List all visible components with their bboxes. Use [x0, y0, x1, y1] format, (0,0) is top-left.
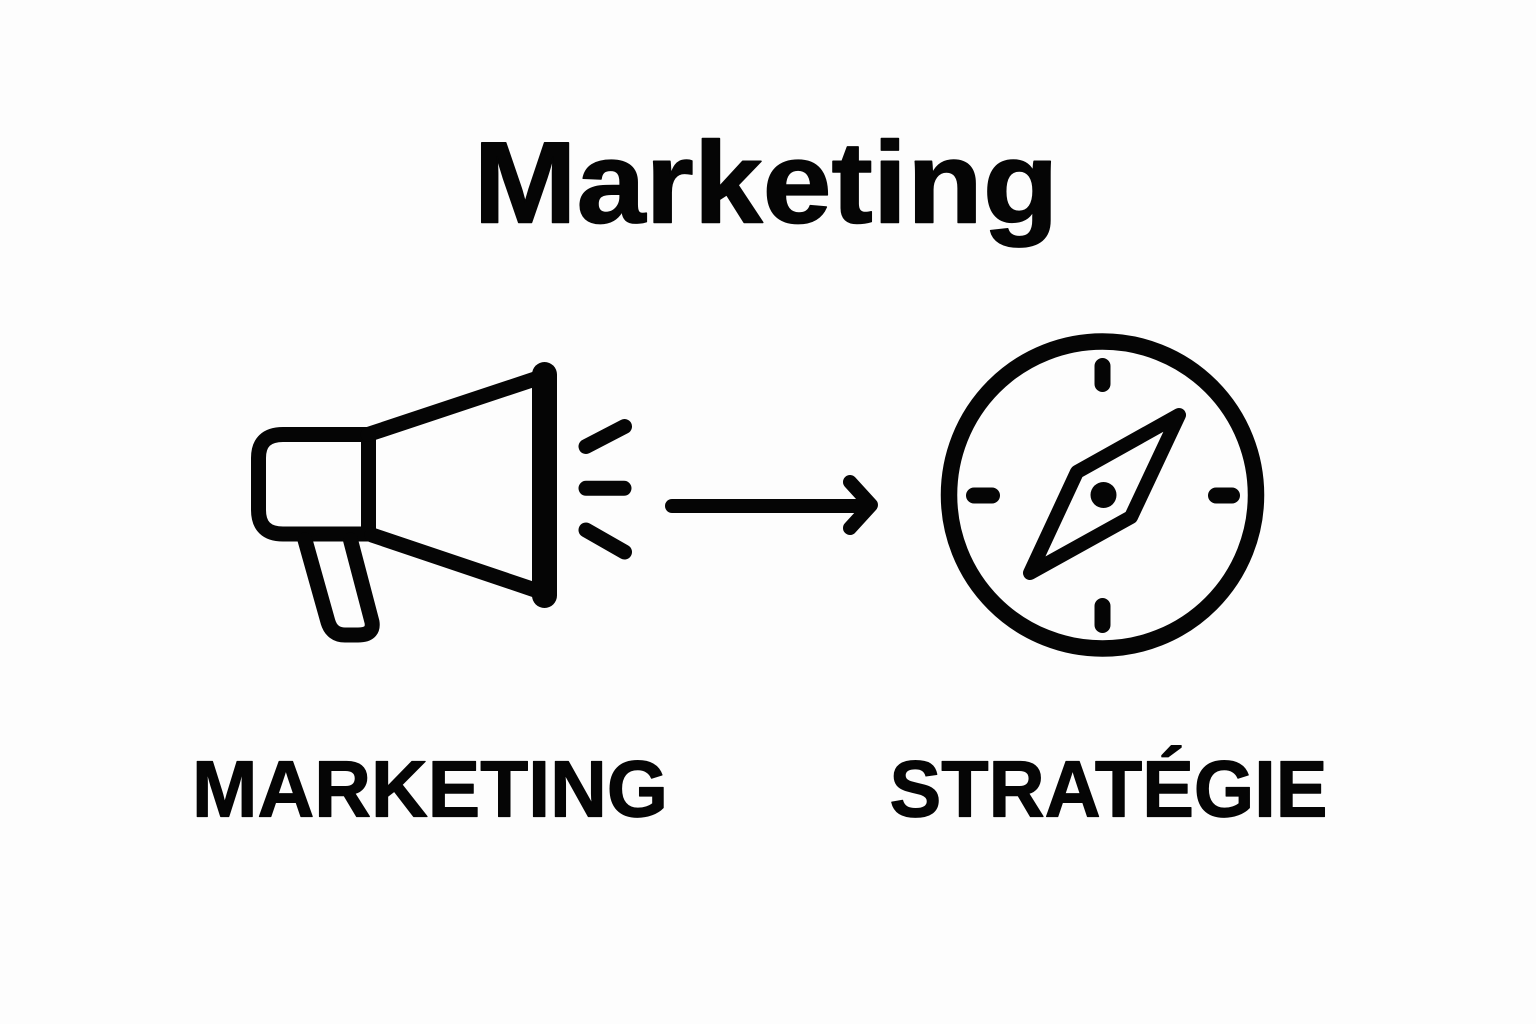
label: marketing: MARKETING	[192, 744, 668, 834]
label: stratégie: STRATÉGIE	[890, 744, 1328, 834]
icon: megaphone	[258, 374, 624, 635]
title: Marketing	[474, 118, 1058, 248]
arrow	[672, 482, 871, 528]
icon: compass	[949, 342, 1256, 648]
